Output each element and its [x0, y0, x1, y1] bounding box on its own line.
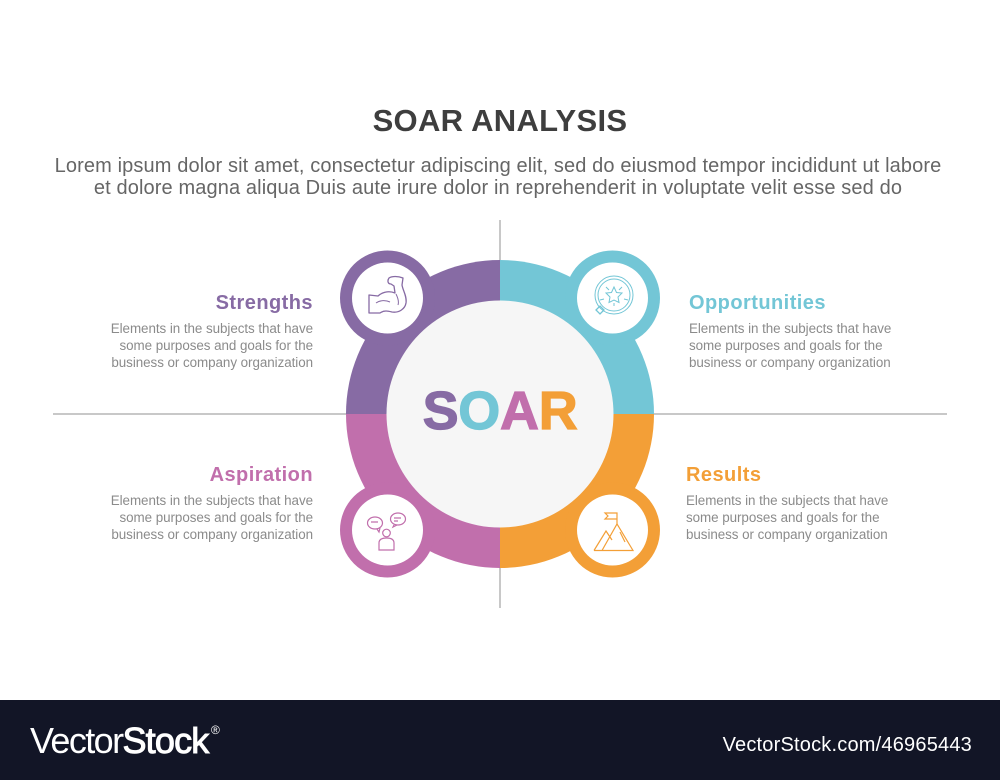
text: strengths: Elements in the subjects that have [111, 321, 313, 336]
intro text: Lorem ipsum dolor sit amet, consectetur adipiscing elit, sed do eiusmod tempor incididunt ut labore [55, 155, 941, 177]
quadrant: results [500, 414, 660, 578]
center circle [386, 300, 614, 528]
text: opportunities: some purposes and goals for the [689, 338, 882, 353]
intro text: et dolore magna aliqua Duis aute irure dolor in reprehenderit in voluptate velit esse sed do [94, 177, 902, 199]
title: SOAR ANALYSIS [373, 103, 627, 138]
text: strengths: business or company organization [111, 355, 313, 370]
text: opportunities [689, 292, 891, 370]
text: opportunities: Elements in the subjects that have [689, 321, 891, 336]
text: aspiration: some purposes and goals for the [120, 510, 313, 525]
quadrant: opportunities [500, 250, 660, 414]
text: results: Results [686, 464, 761, 486]
text: aspiration: business or company organization [111, 527, 313, 542]
icon: flexed arm [352, 262, 423, 334]
text: strengths [111, 292, 313, 370]
icon: star in magnifier [577, 262, 648, 334]
text: results: business or company organization [686, 527, 888, 542]
text: results [686, 464, 888, 542]
quadrant: aspiration [340, 414, 500, 578]
quadrant: strengths [340, 250, 500, 414]
text: strengths: some purposes and goals for the [120, 338, 313, 353]
center word SOAR: SOAR [423, 381, 577, 441]
text: results: some purposes and goals for the [686, 510, 879, 525]
footer bar [0, 700, 1000, 780]
text: aspiration [111, 464, 313, 542]
footer bar: ® [211, 723, 220, 737]
icon: person with speech bubbles [352, 494, 423, 566]
text: opportunities: Opportunities [689, 292, 826, 314]
text: aspiration: Aspiration [210, 464, 313, 486]
text: strengths: Strengths [216, 292, 313, 314]
text: results: Elements in the subjects that have [686, 493, 888, 508]
text: aspiration: Elements in the subjects that have [111, 493, 313, 508]
text: opportunities: business or company organization [689, 355, 891, 370]
footer url: VectorStock.com/46965443 [723, 734, 972, 756]
footer logo: VectorStock [30, 720, 209, 761]
intro text [55, 155, 941, 199]
icon: mountains with flag [577, 494, 648, 566]
